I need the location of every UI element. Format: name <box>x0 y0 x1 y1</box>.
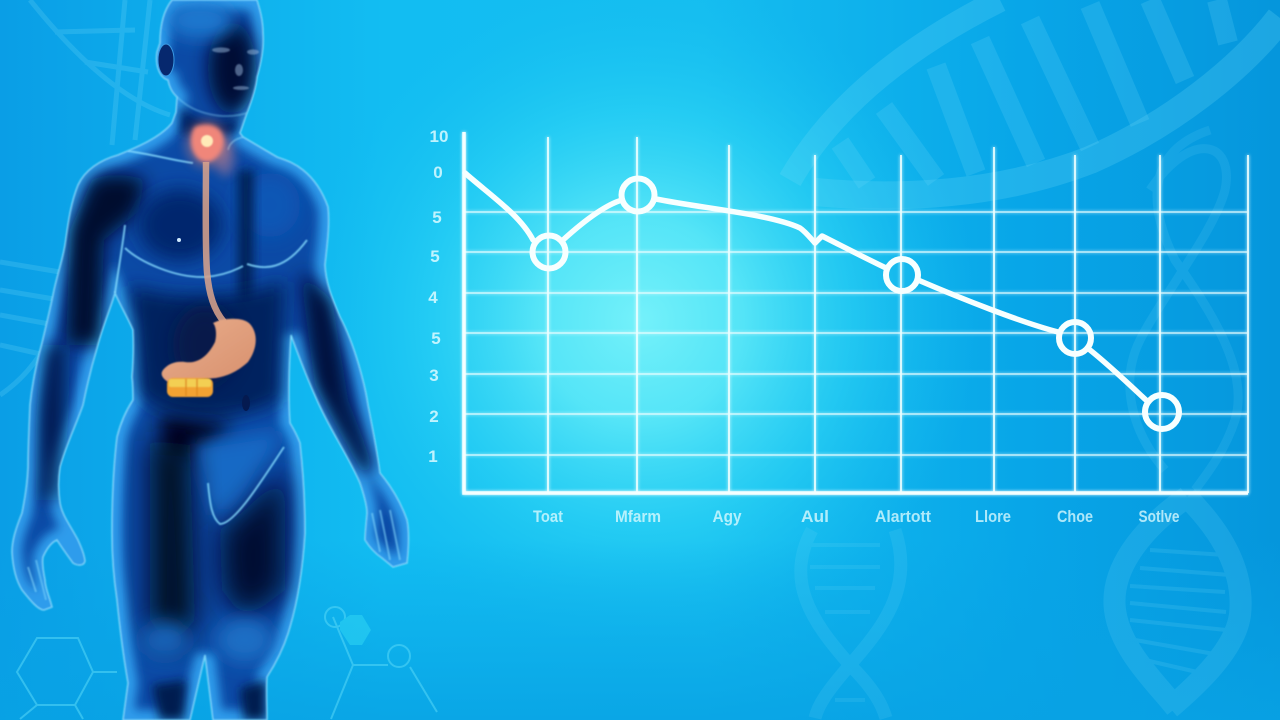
y axis labels: 10 <box>430 127 448 146</box>
throat: glowing larynx <box>185 120 235 176</box>
y axis labels: 5 <box>430 247 440 266</box>
x axis labels: Alartott <box>875 507 931 526</box>
thigh shading <box>150 440 195 650</box>
x axis labels: Aul <box>801 507 829 526</box>
dna helix: bottom centre <box>801 530 901 718</box>
nipple highlight <box>177 238 181 242</box>
stomach <box>162 319 256 382</box>
face <box>212 47 259 90</box>
grid lines <box>464 137 1248 493</box>
muscle outlines <box>28 97 400 600</box>
y axis labels: 3 <box>429 366 439 385</box>
y axis labels <box>428 127 448 466</box>
pelvis shading <box>158 415 232 462</box>
knee shading <box>217 618 273 662</box>
abdomen shading <box>130 280 285 418</box>
x axis labels: Llore <box>975 507 1011 526</box>
rim glow <box>12 0 408 720</box>
x axis labels: Toat <box>533 507 563 526</box>
lower leg shading <box>152 680 186 720</box>
x axis labels: Choe <box>1057 507 1093 526</box>
y axis labels: 4 <box>428 288 438 307</box>
line chart <box>428 127 1248 526</box>
duodenum: yellow segment <box>167 378 213 397</box>
x axis labels <box>533 507 1180 526</box>
navel <box>242 395 250 411</box>
esophagus <box>206 162 224 322</box>
y axis labels: 2 <box>429 407 439 426</box>
dna helix: right middle <box>1130 130 1238 490</box>
x axis labels: Sotlve <box>1138 507 1180 526</box>
y axis labels: 0 <box>433 163 443 182</box>
y axis labels: 5 <box>432 208 442 227</box>
x axis labels: Agy <box>712 507 742 526</box>
dna helix: left <box>0 0 170 395</box>
dna helix: top right <box>790 0 1280 195</box>
data line <box>465 173 1148 402</box>
ear <box>158 44 174 76</box>
y axis labels: 1 <box>428 447 438 466</box>
head shading <box>208 22 256 114</box>
neck shading <box>180 105 240 135</box>
chart axes <box>464 132 1248 493</box>
x axis labels: Mfarm <box>615 507 661 526</box>
shoulder and arm shading <box>66 175 145 345</box>
body silhouette <box>12 0 408 720</box>
hexagon molecules <box>17 607 437 719</box>
human body figure <box>12 0 408 720</box>
dna helix: bottom right <box>1114 497 1241 708</box>
y axis labels: 5 <box>431 329 441 348</box>
chest shading <box>138 189 222 261</box>
data points <box>532 178 1179 429</box>
silhouette outline <box>12 0 408 720</box>
